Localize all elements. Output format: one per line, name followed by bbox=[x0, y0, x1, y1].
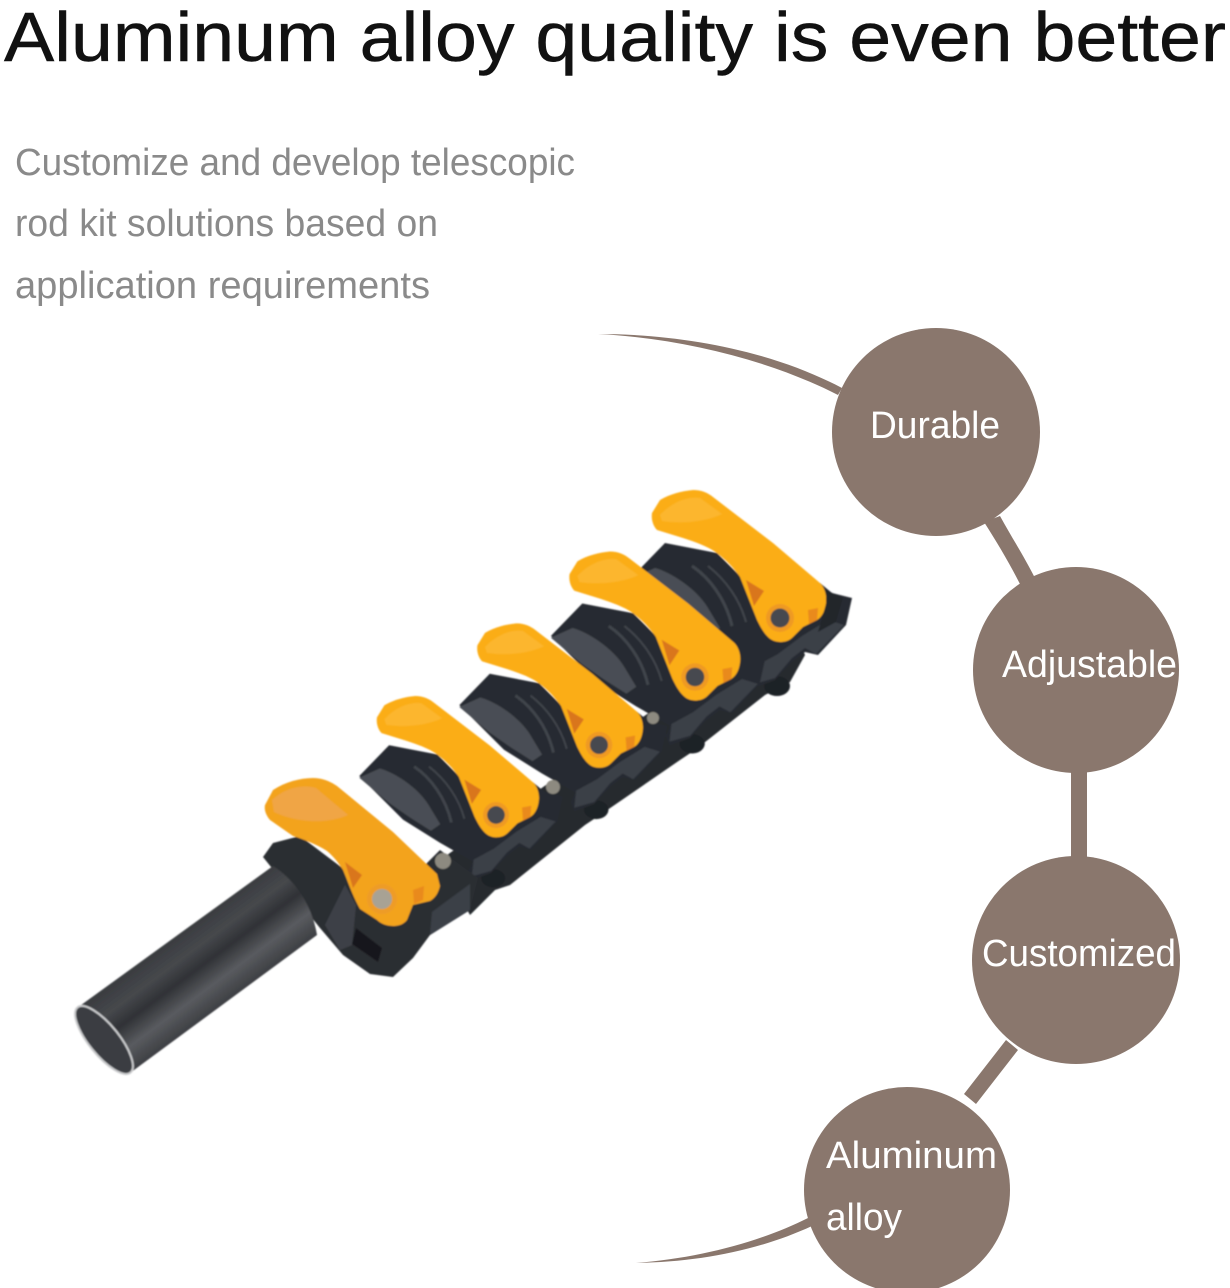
feature circle: Customized: Customized bbox=[982, 933, 1176, 975]
feature circle: Adjustable: Adjustable bbox=[1002, 644, 1177, 686]
curved connector line linking the feature circles bbox=[598, 334, 1087, 1263]
feature circle: Customized bbox=[972, 856, 1180, 1064]
feature circle: Aluminum alloy bbox=[804, 1087, 1010, 1288]
feature circle: Aluminum alloy: alloy bbox=[826, 1197, 902, 1239]
feature circle: Durable: Durable bbox=[870, 405, 1000, 447]
feature circle: Durable bbox=[832, 328, 1040, 536]
subtitle text block: application requirements bbox=[15, 265, 430, 307]
clamp 5 bbox=[633, 490, 852, 696]
clamp 2 bbox=[359, 696, 563, 888]
clamp 3 bbox=[459, 623, 667, 819]
clamp 1 bbox=[263, 778, 478, 977]
subtitle text block bbox=[15, 142, 575, 307]
subtitle text block: Customize and develop telescopic bbox=[15, 142, 575, 184]
product illustration: telescopic rod with five orange clamps bbox=[66, 490, 852, 1082]
clamp 4 bbox=[551, 552, 766, 753]
subtitle text block: rod kit solutions based on bbox=[15, 203, 438, 245]
feature circle: Aluminum alloy: Aluminum bbox=[826, 1135, 997, 1177]
title: Aluminum alloy quality is even better bbox=[4, 0, 1226, 76]
feature circle: Adjustable bbox=[973, 567, 1179, 773]
aluminum pipe bbox=[66, 866, 317, 1082]
clamp spine behind the units bbox=[440, 620, 805, 915]
